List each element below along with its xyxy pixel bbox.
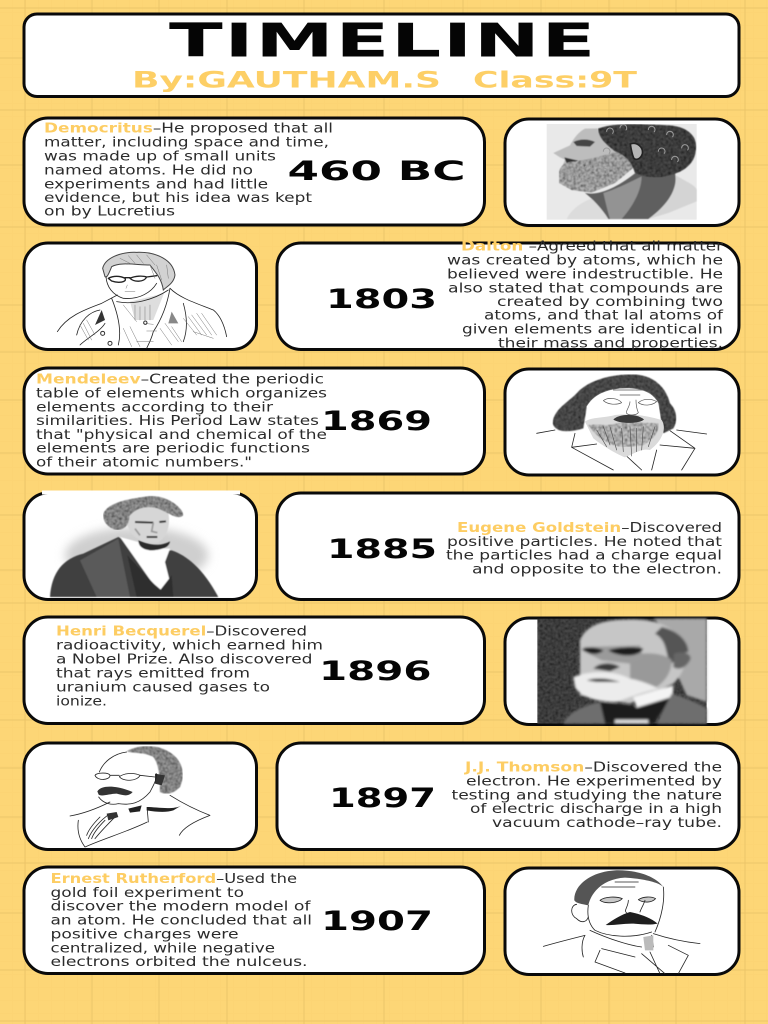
text: Rutherford description: Ernest Rutherford –Used the (50, 872, 297, 887)
text: Thomson description: J.J. Thomson –Discovered the (464, 760, 722, 775)
text: Becquerel description: uranium caused gases to (56, 680, 270, 695)
panel: title (24, 14, 739, 97)
text: Democritus description: matter, including space and time, (44, 136, 329, 151)
panel: Dalton text (277, 240, 739, 351)
text: Mendeleev description: Mendeleev –Created the periodic (36, 373, 324, 388)
text: Becquerel description: ionize. (56, 694, 107, 709)
text: Rutherford description: gold foil experiment to (50, 886, 244, 901)
portrait: Dalton (57, 252, 227, 348)
text: Goldstein description: Eugene Goldstein –Discovered (457, 521, 722, 536)
year: 1885: 1885 (327, 534, 437, 565)
hair (598, 124, 696, 177)
text: Dalton description: atoms, and that lal atoms of (484, 309, 724, 324)
text: Rutherford description: an atom. He concluded that all (50, 914, 312, 929)
year: 1897: 1897 (329, 783, 436, 814)
text: Democritus description: was made up of small units (44, 150, 276, 165)
panel: Mendeleev portrait (505, 369, 739, 475)
heading: TIMELINE: TIMELINE (169, 14, 597, 68)
text: Becquerel description: radioactivity, which earned him (56, 639, 323, 654)
beard (559, 150, 635, 193)
text: Thomson description: testing and studying the nature (452, 788, 722, 803)
text: Democritus description (44, 122, 333, 220)
text: Mendeleev description: elements are periodic functions (36, 442, 310, 457)
text: Democritus description: evidence, but his idea was kept (44, 191, 312, 206)
text: Democritus description: Democritus –He proposed that all (44, 122, 333, 137)
panel: Rutherford text (24, 867, 484, 974)
author line: Class:9T (473, 68, 638, 94)
text: Democritus description: on by Lucretius (44, 205, 175, 220)
text: Mendeleev description: elements according to their (36, 400, 274, 415)
portrait: Mendeleev (537, 374, 707, 470)
text: Dalton description: was created by atoms, which he (447, 253, 723, 268)
panel: Dalton portrait (24, 243, 256, 350)
year: 460 BC: 460 BC (288, 156, 466, 187)
portrait: Becquerel (537, 619, 707, 724)
panel: Mendeleev text (24, 368, 484, 474)
year: 1869: 1869 (321, 406, 432, 437)
text: Democritus description: named atoms. He did no (44, 163, 253, 178)
text: Rutherford description: electrons orbited the nulceus. (50, 955, 308, 970)
text: Dalton description: believed were indestructible. He (447, 267, 723, 282)
text: Goldstein description: the particles had a charge equal (446, 549, 722, 564)
text: Mendeleev description: of their atomic numbers." (36, 455, 252, 470)
text: Rutherford description (50, 872, 312, 970)
text: Rutherford description: centralized, while negative (50, 942, 275, 957)
panel: Democritus text (24, 118, 484, 225)
portrait: Democritus (547, 124, 697, 220)
text: Mendeleev description (36, 373, 327, 470)
text: Becquerel description (56, 625, 323, 709)
text: Dalton description: their mass and properties. (498, 336, 723, 351)
author line (132, 68, 638, 94)
text: Dalton description (447, 240, 724, 351)
text: Dalton description: also stated that compounds are (448, 281, 723, 296)
panel: Democritus portrait (505, 119, 739, 226)
text: Thomson description: vacuum cathode–ray tube. (492, 816, 722, 831)
text: Dalton description: Dalton –Agreed that all matter (461, 240, 724, 255)
panel: Goldstein portrait (24, 490, 256, 600)
text: Dalton description: created by combining two (497, 295, 723, 310)
year: 1896: 1896 (319, 656, 432, 687)
text: Goldstein description: positive particles. He noted that (447, 535, 722, 550)
panel: Becquerel text (24, 617, 484, 724)
text: Mendeleev description: that "physical and chemical of the (36, 428, 327, 443)
year: 1907: 1907 (321, 906, 433, 937)
panel: Becquerel portrait (505, 618, 739, 724)
portrait: Goldstein (50, 496, 218, 597)
author line: By:GAUTHAM.S (132, 68, 441, 94)
panel: Goldstein text (277, 493, 739, 600)
text: Dalton description: given elements are identical in (462, 323, 723, 338)
portrait: Rutherford (543, 870, 700, 974)
text: Thomson description: electron. He experimented by (466, 774, 722, 789)
text: Mendeleev description: similarities. His Period Law states (36, 414, 319, 429)
year: 1803: 1803 (326, 284, 437, 315)
text: Rutherford description: positive charges were (50, 928, 238, 943)
text: Thomson description: of electric discharge in a high (470, 802, 722, 817)
text: Democritus description: experiments and had little (44, 177, 268, 192)
text: Becquerel description: a Nobel Prize. Also discovered (56, 652, 312, 667)
panel: Thomson portrait (24, 743, 256, 850)
text: Becquerel description: that rays emitted from (56, 666, 250, 681)
text: Mendeleev description: table of elements which organizes (36, 386, 327, 401)
text: Rutherford description: discover the modern model of (50, 900, 311, 915)
panel: Rutherford portrait (505, 868, 739, 974)
text: Goldstein description: and opposite to the electron. (472, 562, 722, 577)
text: Goldstein description (446, 521, 722, 577)
panel: Thomson text (277, 743, 739, 850)
text: Becquerel description: Henri Becquerel –Discovered (56, 625, 307, 640)
portrait: Thomson (70, 746, 210, 847)
text: Thomson description (452, 760, 722, 831)
